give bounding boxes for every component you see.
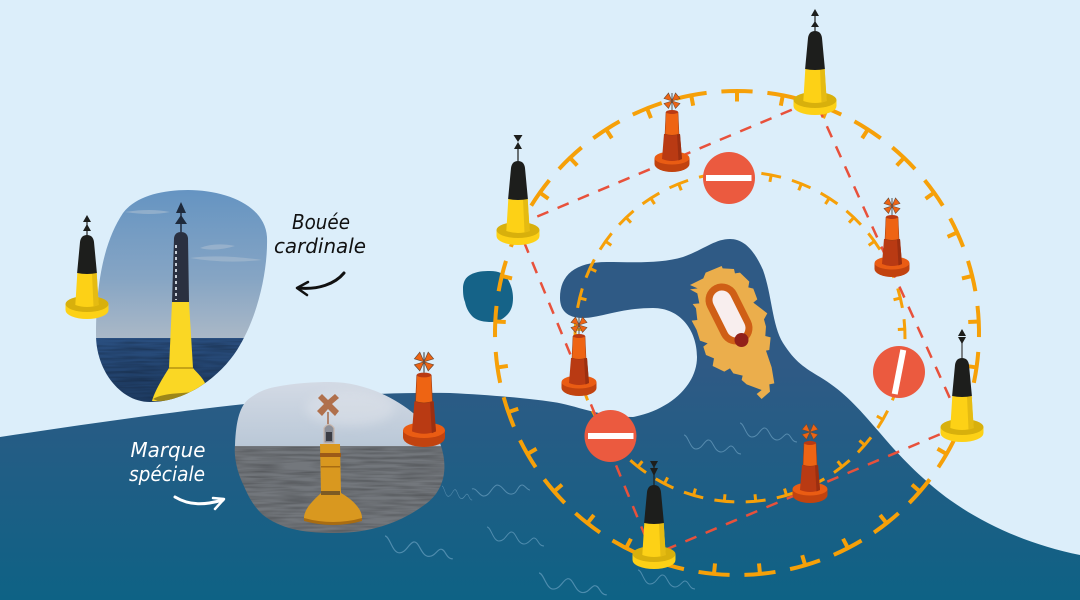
special mark: top	[654, 93, 690, 172]
sea waves	[385, 423, 797, 595]
small blue island	[463, 271, 513, 322]
cardinal buoy: east	[940, 329, 984, 442]
sea and coastline	[0, 239, 1080, 600]
special mark: left	[562, 317, 596, 396]
cardinal buoy: enlarged beside photo	[66, 215, 108, 319]
photo: cardinal buoy at sea	[96, 190, 268, 402]
cardinal buoy: south	[632, 461, 676, 569]
cardinal buoy: west	[496, 135, 540, 245]
label: spéciale: spéciale	[129, 462, 205, 486]
outer dashed ring	[495, 91, 979, 575]
special mark: right	[874, 198, 910, 277]
arrow: to cardinal photo	[297, 273, 344, 295]
cardinal buoy: north	[794, 9, 836, 115]
arrow: to special mark photo	[175, 497, 224, 509]
special mark: enlarged beside photo	[403, 352, 445, 447]
island: hazard zone	[690, 266, 774, 399]
label: cardinale: cardinale	[274, 234, 366, 258]
inner dashed ring	[575, 172, 905, 502]
photo: special mark at sea	[230, 378, 450, 538]
no-entry sign: top	[703, 152, 755, 204]
hazard capsule and dot	[722, 300, 748, 347]
no-entry sign: left	[584, 410, 636, 462]
special mark: bottom	[792, 424, 828, 503]
label: Marque: Marque	[130, 438, 206, 462]
label: Bouée: Bouée	[292, 210, 350, 234]
no-entry sign: right	[873, 346, 925, 398]
red dashed perimeter	[517, 100, 962, 555]
